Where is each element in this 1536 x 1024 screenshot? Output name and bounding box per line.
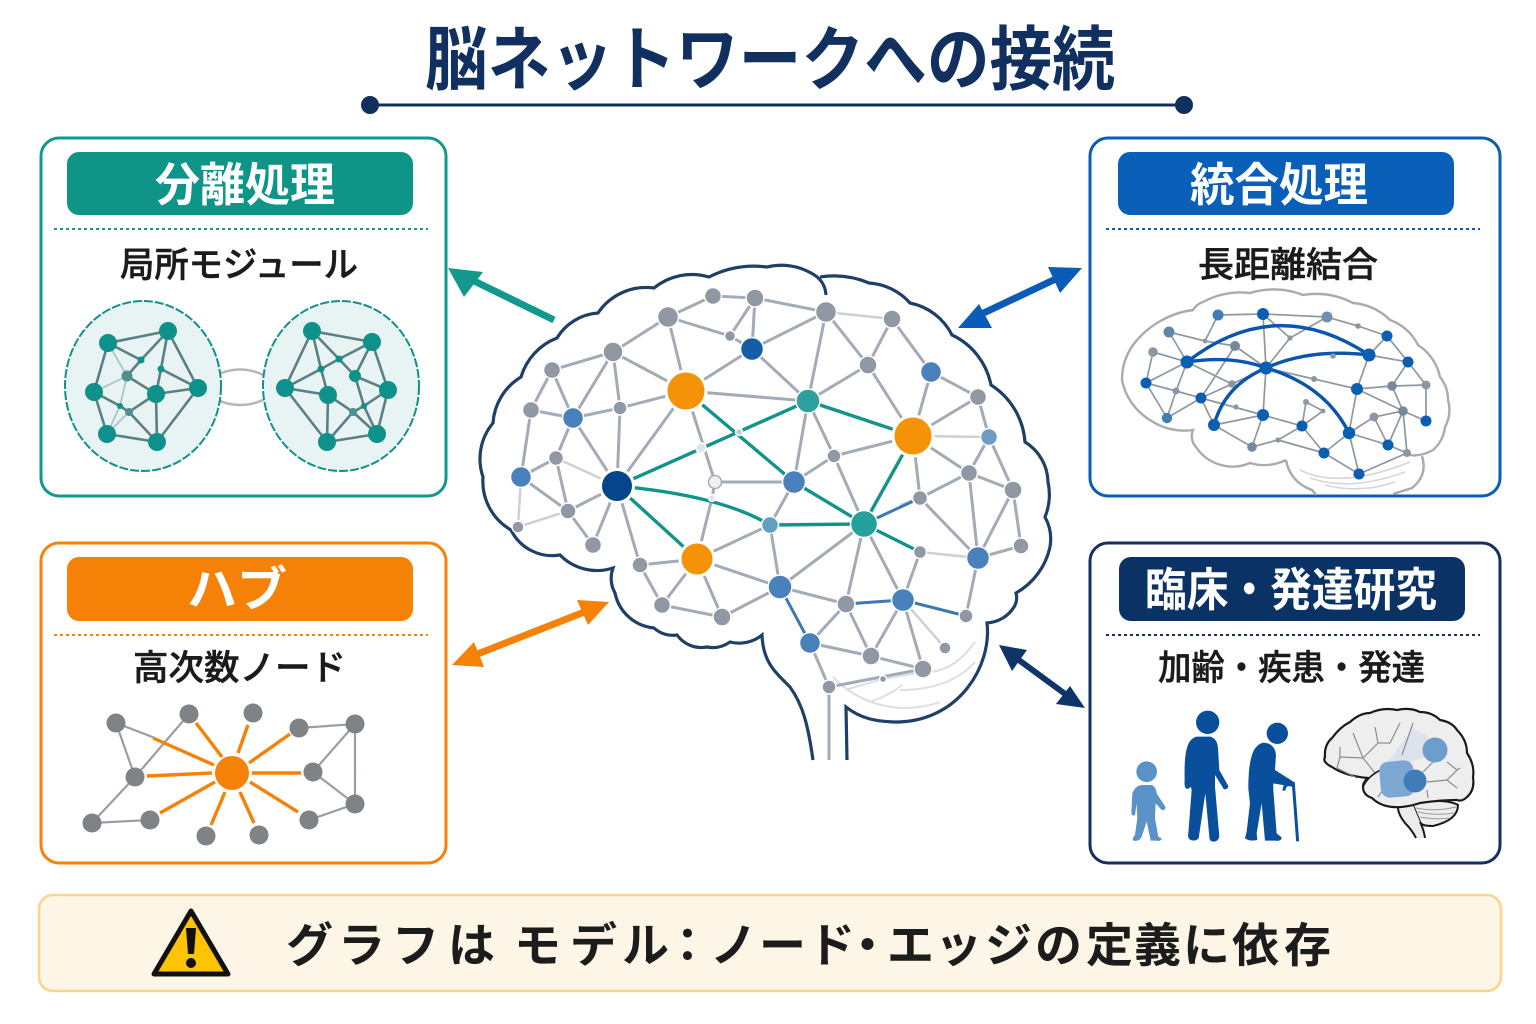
arrow: brain to segregation (448, 268, 554, 320)
icon: warning triangle (154, 911, 228, 974)
panel: hubs (41, 543, 446, 863)
panel: clinical and developmental studies (1090, 543, 1500, 863)
network nodes (510, 288, 1029, 694)
icon: child, adult and elder figures (1131, 711, 1298, 842)
heading: hubs: ハブ (187, 564, 287, 617)
gray network edges (521, 296, 1021, 760)
heading: segregation: 分離処理 (155, 159, 335, 211)
heading: segregation (67, 152, 413, 215)
teal pathways (617, 391, 920, 559)
diagram: small brain with long-range links (1122, 289, 1449, 495)
cerebellum folds (833, 642, 975, 708)
subheading: local modules: 局所モジュール (120, 246, 358, 285)
banner: caveat (39, 895, 1501, 991)
arrow: brain to integration (958, 267, 1082, 328)
banner text: グラフは モデル：ノード・エッジの定義に依存 (286, 919, 1331, 972)
subheading: long-range connections: 長距離結合 (1198, 246, 1378, 285)
panel: integration (1090, 138, 1500, 496)
panel: segregation (41, 138, 446, 496)
title: 脳ネットワークへの接続 (425, 21, 1115, 99)
heading: clinical and developmental: 臨床・発達研究 (1145, 564, 1437, 616)
diagram: central brain network (480, 265, 1051, 760)
diagram: two modules (65, 301, 419, 471)
arrow: brain to clinical studies (999, 645, 1085, 708)
diagram: hub and spokes (82, 704, 364, 846)
brain outline (480, 265, 1051, 760)
heading: hubs (67, 557, 413, 621)
subheading: high-degree nodes: 高次数ノード (133, 649, 346, 688)
heading: integration: 統合処理 (1190, 159, 1368, 211)
arrow: brain to hubs (452, 600, 609, 667)
heading: integration (1118, 152, 1454, 215)
subheading: aging, disease, development: 加齢・疾患・発達 (1158, 649, 1425, 688)
light network edges (518, 312, 989, 648)
icon: brain with highlighted regions (1324, 709, 1473, 838)
blue pathways (780, 498, 966, 643)
